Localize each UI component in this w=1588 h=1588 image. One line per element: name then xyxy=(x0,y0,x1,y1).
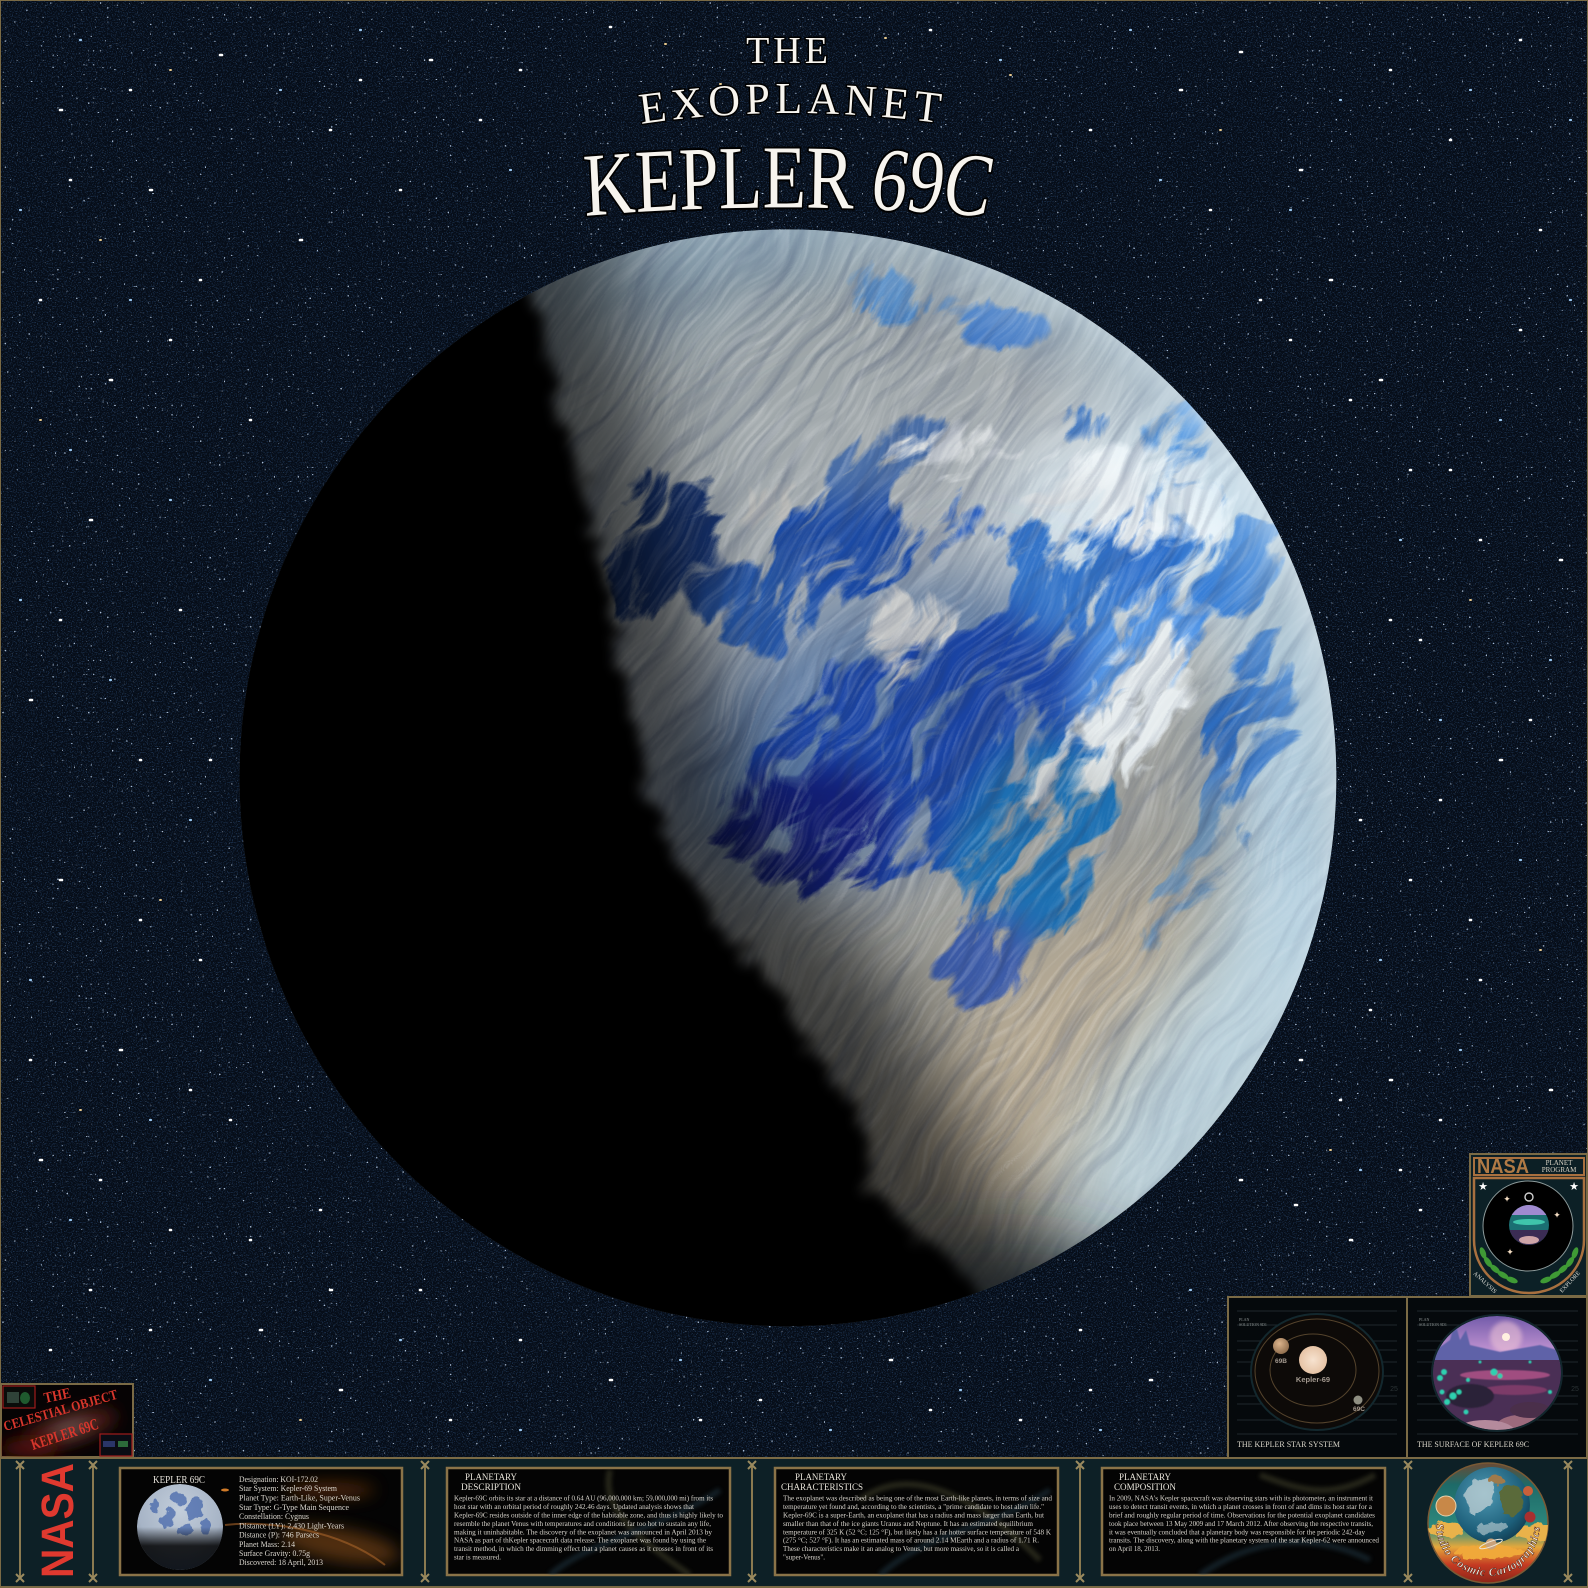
star system: orbit disc xyxy=(1251,1314,1383,1430)
data card: facts list: Surface Gravity: 0.75g xyxy=(239,1548,311,1558)
planet: cloud base xyxy=(240,176,1399,1326)
description: heading: DESCRIPTION xyxy=(461,1483,521,1493)
badge: stars: ★ xyxy=(1569,1181,1579,1193)
star system: planet 69B xyxy=(1273,1338,1289,1354)
characteristics: body text: temperature of 325 K (52 °C; 125 °F), but likely has a far hotter surface temperature of 548 K xyxy=(783,1528,1051,1536)
data card: facts list: Planet Type: Earth-Like, Super-Venus xyxy=(239,1492,361,1502)
stamp: THE: THE xyxy=(43,1386,72,1407)
badge: sparkles: ✦ xyxy=(1553,1210,1561,1220)
star system: 69C label: 69C xyxy=(1353,1406,1365,1413)
bottom information strip xyxy=(1,1457,1587,1587)
star system: Kepler-69 label: Kepler-69 xyxy=(1296,1375,1330,1384)
star system: faint number: 25 xyxy=(1390,1386,1398,1393)
description: body text: NASA as part of thKepler spacecraft data release. The exoplanet was found by using the xyxy=(454,1536,706,1544)
panel: planetary characteristics xyxy=(775,1468,1058,1575)
description: body text xyxy=(454,1494,724,1562)
panel: badge NASA planet program xyxy=(1470,1154,1587,1296)
star system: small header: SOLUTION 9D1 xyxy=(1239,1322,1267,1327)
characteristics: body text xyxy=(783,1494,1053,1562)
characteristics: body text: temperature yet found and, according to the scientists, a "prime candidate to host alien life." xyxy=(783,1503,1044,1511)
badge: sparkles xyxy=(1503,1194,1561,1257)
emblem: striped planet xyxy=(1436,1496,1456,1516)
data card: facts list: Planet Mass: 2.14 xyxy=(239,1539,296,1549)
star system: host star xyxy=(1299,1346,1327,1374)
badge: shield outline xyxy=(1474,1178,1584,1293)
surface: alien landscape xyxy=(1430,1314,1564,1444)
planet Kepler 69C xyxy=(240,229,1336,1326)
data card: title: KEPLER 69C xyxy=(153,1475,205,1486)
characteristics: body text: "super-Venus". xyxy=(783,1554,825,1562)
surface: small header: SOLUTION 9D1 xyxy=(1419,1322,1447,1327)
characteristics: body text: These characteristics make it an analog to Venus, but more massive, so it is called a xyxy=(783,1545,1020,1553)
composition: swirl texture xyxy=(1200,1475,1375,1575)
characteristics: body text: (275 °C; 527 °F). It has an estimated mass of around 2.14 MEarth and a radius of 1.71 R. xyxy=(783,1536,1039,1544)
badge: NASA header box: PROGRAM xyxy=(1542,1166,1577,1174)
data card: facts list: Distance (P): 746 Parsecs xyxy=(239,1530,320,1540)
title xyxy=(582,30,995,218)
stamp: red nebula xyxy=(0,1400,120,1456)
description: body text: Kepler-69C orbits its star at a distance of 0.64 AU (96,000,000 km; 59,000,000 mi) from its xyxy=(454,1494,713,1502)
badge: laurel left xyxy=(1478,1246,1519,1285)
stamp: KEPLER 69C: KEPLER 69C xyxy=(29,1416,101,1454)
strip: NASA logo: NASA xyxy=(32,1463,83,1578)
data card: facts list: Constellation: Cygnus xyxy=(239,1511,310,1521)
badge: NASA header box xyxy=(1474,1156,1584,1178)
panel: celestial object stamp xyxy=(0,1384,133,1457)
data card: facts list: Star Type: G-Type Main Sequence xyxy=(239,1502,349,1512)
badge: stars: ★ xyxy=(1478,1181,1488,1193)
composition: body text: uses to detect transit events, in which a planet crosses in front of and dims its host star for a xyxy=(1109,1503,1373,1511)
stamp: CELESTIAL OBJECT: CELESTIAL OBJECT xyxy=(2,1388,120,1435)
data card: mini planet xyxy=(137,1484,223,1570)
description: body text: host star with an orbital period of roughly 242.46 days. Updated analysis shows that xyxy=(454,1503,694,1511)
badge: laurel right xyxy=(1539,1246,1580,1285)
badge: NASA header box: NASA xyxy=(1477,1156,1529,1178)
characteristics: body text: Kepler-69C is a super-Earth, an exoplanet that has a radius and mass larger than Earth, but xyxy=(783,1512,1044,1520)
description: body text: resemble the planet Venus with temperatures and conditions far too hot to sustain any life, xyxy=(454,1520,711,1528)
star system: small header: PLAN xyxy=(1239,1317,1249,1322)
characteristics: heading: CHARACTERISTICS xyxy=(781,1483,863,1493)
star system: 69B label: 69B xyxy=(1275,1358,1287,1365)
title: THE: THE xyxy=(746,30,832,72)
characteristics: heading: PLANETARY xyxy=(795,1473,847,1483)
star system: orbits xyxy=(1255,1319,1379,1423)
data card: facts list: Star System: Kepler-69 System xyxy=(239,1483,337,1493)
description: body text: star is measured. xyxy=(454,1554,501,1562)
stamp: data box top xyxy=(3,1386,35,1408)
emblem: circular name: Studio Cosmic Cartographics xyxy=(1436,1524,1540,1576)
star system: planet 69C xyxy=(1354,1396,1362,1404)
planet: limb glow xyxy=(586,230,1336,1262)
title: KEPLER 69C: KEPLER 69C xyxy=(582,146,995,218)
badge: sparkles: ✦ xyxy=(1506,1247,1514,1257)
planet: lower dim xyxy=(922,1194,1126,1294)
composition: body text xyxy=(1109,1494,1380,1553)
composition: body text: transits. The discovery, along with the planetary system of the star Kepler-62 were announced xyxy=(1109,1536,1380,1544)
composition: body text: brief and roughly regular period of time. Observations for the potential exoplanet candidates xyxy=(1109,1512,1375,1520)
composition: heading xyxy=(1114,1473,1176,1493)
stamp: data box bottom xyxy=(100,1434,132,1456)
description: heading: PLANETARY xyxy=(465,1473,517,1483)
description: body text: Kepler-69C resides outside of the inner edge of the habitable zone, and thus is highly likely to xyxy=(454,1512,724,1520)
composition: body text: on April 18, 2013. xyxy=(1109,1545,1160,1553)
star system: caption: THE KEPLER STAR SYSTEM xyxy=(1237,1439,1340,1449)
planet: fibre texture xyxy=(240,229,1336,1280)
emblem: Studio Cosmic Cartographics xyxy=(1427,1462,1549,1584)
badge: NASA header box: PLANET xyxy=(1546,1159,1573,1167)
planet: blue oceans xyxy=(602,260,1303,1013)
title: EXOPLANET: EXOPLANET xyxy=(637,82,944,126)
description: body text: making it uninhabitable. The discovery of the exoplanet was announced in April 2013 by xyxy=(454,1528,713,1536)
description: heading xyxy=(461,1473,521,1493)
badge: ANALYSIS label: ANALYSIS xyxy=(1472,1271,1497,1295)
surface: caption: THE SURFACE OF KEPLER 69C xyxy=(1417,1439,1529,1449)
panel: planetary description xyxy=(447,1468,730,1575)
surface: faint number: 25 xyxy=(1571,1386,1579,1393)
badge: ornament ball xyxy=(1509,1193,1549,1245)
strip: ornamental dividers xyxy=(16,1461,1572,1582)
panel: planetary composition xyxy=(1102,1468,1385,1575)
planet: white cloud masses xyxy=(742,418,1253,805)
emblem: ringed planet xyxy=(1479,1537,1503,1551)
panel: Kepler 69C data card xyxy=(120,1468,402,1575)
emblem: clouds xyxy=(1427,1522,1553,1559)
characteristics: heading xyxy=(781,1473,863,1493)
surface: small header: PLAN xyxy=(1419,1317,1429,1322)
panel: the surface of Kepler 69C xyxy=(1407,1297,1587,1458)
composition: heading: PLANETARY xyxy=(1119,1473,1171,1483)
data card: facts list xyxy=(239,1474,361,1567)
data card: orange nebula xyxy=(221,1482,402,1571)
planet: night side shadow xyxy=(240,244,1099,1326)
emblem: small red planets xyxy=(1523,1486,1536,1522)
badge: sparkles: ✦ xyxy=(1503,1194,1511,1204)
badge: central circle xyxy=(1483,1181,1573,1271)
characteristics: body text: smaller than that of the ice giants Uranus and Neptune. It has an estimated equilibrium xyxy=(783,1520,1034,1528)
badge: stars xyxy=(1478,1181,1579,1193)
composition: body text: took place between 13 May 2009 and 17 March 2012. After observing the respective transits, xyxy=(1109,1520,1373,1528)
composition: body text: In 2009, NASA's Kepler spacecraft was observing stars with its photometer, an instrument it xyxy=(1109,1494,1373,1502)
data card: facts list: Distance (LY): 2,430 Light-Years xyxy=(239,1520,345,1530)
characteristics: body text: The exoplanet was described as being one of the most Earth-like planets, in terms of size and xyxy=(783,1494,1053,1502)
data card: facts list: Designation: KOI-172.02 xyxy=(239,1474,318,1484)
data card: facts list: Discovered: 18 April, 2013 xyxy=(239,1557,323,1567)
panel: the Kepler star system xyxy=(1228,1297,1407,1458)
surface: chart rules xyxy=(1417,1311,1578,1434)
emblem: earth xyxy=(1454,1467,1530,1543)
badge: EXPLORE label: EXPLORE xyxy=(1559,1270,1582,1294)
description: swirl texture xyxy=(550,1470,720,1575)
planet: smooth pale haze at lower limb xyxy=(1056,912,1320,1244)
surface: disc rim xyxy=(1432,1315,1562,1431)
composition: body text: it was eventually concluded that a planetary body was responsible for the periodic 242-day xyxy=(1109,1528,1365,1536)
description: body text: transit method, in which the dimming effect that a planet causes as it crosses in front of its xyxy=(454,1545,713,1553)
star system: chart rules xyxy=(1237,1311,1397,1434)
characteristics: swirl texture xyxy=(860,1484,1050,1575)
composition: heading: COMPOSITION xyxy=(1114,1483,1176,1493)
